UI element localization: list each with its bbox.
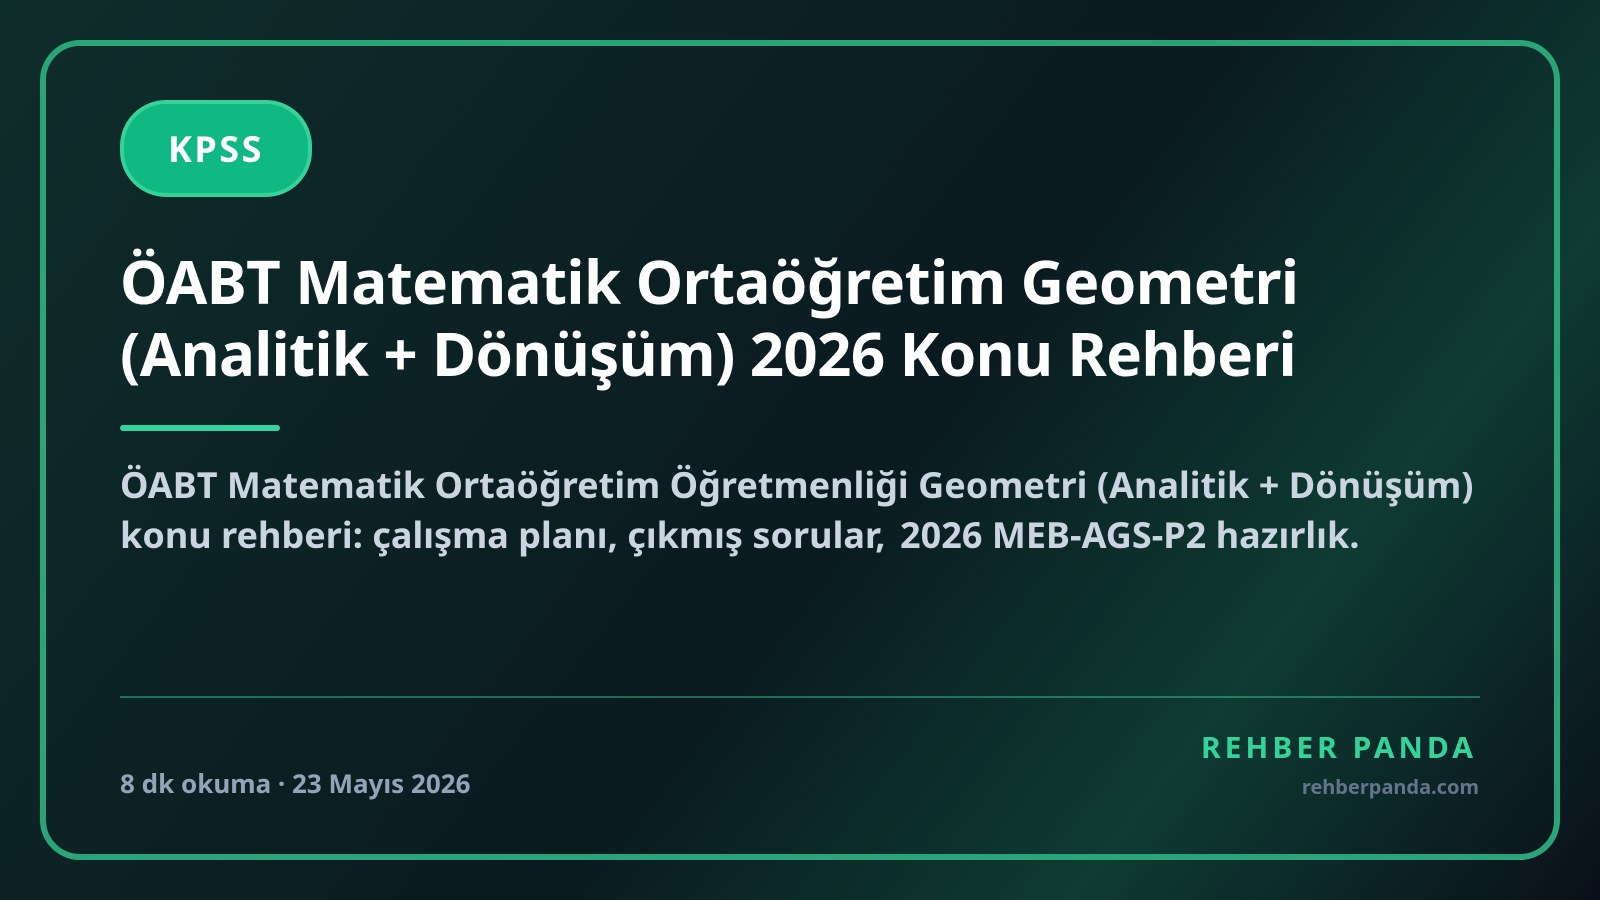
badge: KPSS: KPSS bbox=[168, 124, 264, 173]
website: rehberpanda.com bbox=[1302, 773, 1479, 800]
brand name: REHBER PANDA bbox=[1201, 726, 1477, 767]
reading time and date: 8 dk okuma · 23 Mayıs 2026 bbox=[120, 765, 470, 801]
subtitle bbox=[120, 460, 1473, 559]
title bbox=[120, 240, 1298, 394]
subtitle: ÖABT Matematik Ortaöğretim Öğretmenliği Geometri (Analitik + Dönüşüm) bbox=[120, 460, 1473, 509]
title: (Analitik + Dönüşüm) 2026 Konu Rehberi bbox=[120, 312, 1296, 394]
footer separator bbox=[120, 696, 1480, 698]
badge: KPSS bbox=[120, 100, 312, 197]
title: ÖABT Matematik Ortaöğretim Geometri bbox=[120, 240, 1298, 322]
accent divider bbox=[120, 425, 280, 431]
subtitle: konu rehberi: çalışma planı, çıkmış sorular, 2026 MEB-AGS-P2 hazırlık. bbox=[120, 510, 1359, 559]
